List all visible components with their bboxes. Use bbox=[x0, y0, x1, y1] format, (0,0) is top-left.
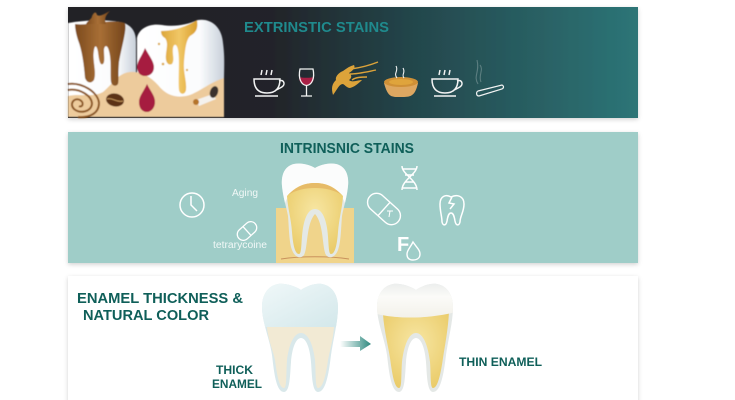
arrow bbox=[340, 336, 371, 351]
chocolate drip bbox=[75, 11, 125, 86]
icon: bowl bbox=[384, 66, 418, 97]
label: thick enamel: ENAMEL bbox=[212, 377, 262, 391]
illustration: thick enamel tooth bbox=[262, 284, 338, 392]
red drops bbox=[137, 48, 154, 76]
illustration: central tooth bbox=[276, 164, 354, 263]
panel: enamel thickness bbox=[68, 276, 638, 400]
honey drip bbox=[161, 20, 197, 94]
icon: broken tooth bbox=[440, 196, 464, 225]
cinnamon spiral bbox=[68, 84, 99, 117]
label: tetracycline: tetrarycoine bbox=[213, 240, 267, 251]
illustration: thin enamel tooth bbox=[377, 284, 453, 392]
icon: fluoride bbox=[397, 234, 420, 260]
icon: capsule T bbox=[364, 190, 404, 228]
icon: second coffee cup bbox=[432, 70, 462, 96]
icon: yellow splash bbox=[332, 62, 378, 95]
icon: dna bbox=[402, 166, 417, 190]
heading: EXTRINSTIC STAINS bbox=[244, 20, 389, 36]
heading: INTRINSNIC STAINS bbox=[280, 141, 414, 157]
coffee bean bbox=[105, 92, 125, 108]
label: aging: Aging bbox=[232, 187, 258, 199]
icon: capsule small bbox=[235, 219, 259, 243]
icon: cigarette bbox=[476, 60, 504, 96]
panel: extrinsic stains bbox=[68, 7, 638, 118]
illustration: stained teeth bbox=[68, 11, 224, 117]
gum bbox=[68, 72, 224, 117]
label: thin enamel: THIN ENAMEL bbox=[459, 355, 542, 369]
heading: ENAMEL THICKNESS & bbox=[77, 291, 244, 307]
label: thick enamel: THICK bbox=[216, 363, 253, 377]
icon: coffee cup bbox=[254, 70, 284, 96]
icon: wine glass bbox=[299, 69, 314, 96]
icon: fluoride: F bbox=[397, 234, 409, 256]
icon: clock bbox=[180, 193, 204, 217]
heading: NATURAL COLOR bbox=[83, 308, 210, 324]
cigarette stub bbox=[196, 94, 216, 106]
panel: intrinsic stains bbox=[68, 132, 638, 263]
